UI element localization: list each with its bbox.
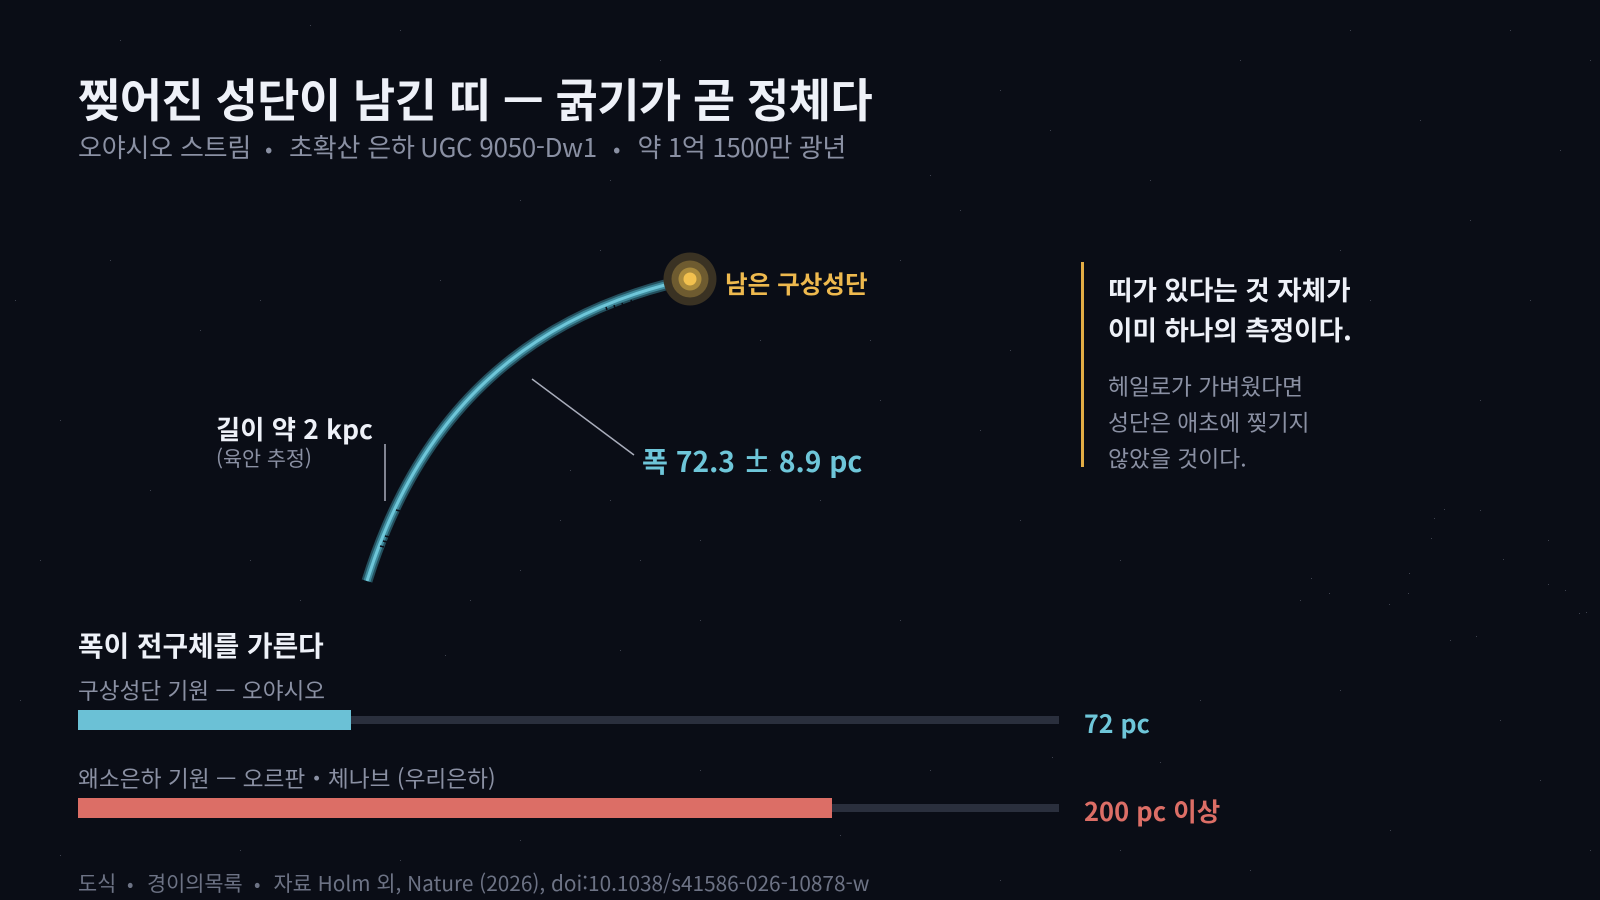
bar: dwarf galaxy origin: 왜소은하 기원 — 오르판・체나브 (우리은하) — [78, 761, 496, 794]
length label: 길이 약 2 kpc — [216, 408, 373, 447]
callout: measurement note — [1081, 262, 1352, 474]
bar: globular cluster origin — [78, 673, 1150, 741]
bar: globular cluster origin: 72 pc — [1084, 705, 1150, 741]
cluster label: 남은 구상성단 — [725, 265, 868, 301]
width label: 폭 72.3 ± 8.9 pc — [642, 440, 862, 481]
stellar stream arc — [367, 285, 665, 581]
subtitle: 약 1억 1500만 광년 — [638, 128, 846, 165]
subtitle: 오야시오 스트림 — [78, 128, 251, 165]
remaining globular cluster icon — [664, 252, 716, 306]
subtitle: 초확산 은하 — [289, 128, 422, 165]
footer source: 경이의목록 — [147, 867, 243, 897]
footer source: • — [254, 870, 260, 897]
subtitle: • — [265, 132, 272, 164]
footer source: • — [127, 870, 133, 897]
length leader line — [384, 444, 386, 501]
callout: measurement note: 성단은 애초에 찢기지 — [1108, 405, 1310, 438]
width leader line — [532, 379, 634, 455]
callout: measurement note: 헤일로가 가벼웠다면 — [1108, 369, 1303, 402]
section heading: 폭이 전구체를 가른다 — [78, 625, 324, 665]
title: 찢어진 성단이 남긴 띠 — 굵기가 곧 정체다 — [78, 65, 872, 131]
bar: globular cluster origin: 구상성단 기원 — 오야시오 — [78, 673, 325, 706]
bar: dwarf galaxy origin: 200 pc 이상 — [1084, 792, 1220, 829]
footer source: 자료 Holm 외, Nature (2026), doi:10.1038/s41586-026-10878-w — [274, 867, 870, 897]
callout: measurement note: 띠가 있다는 것 자체가 — [1108, 269, 1351, 308]
callout: measurement note: 이미 하나의 측정이다. — [1108, 309, 1352, 348]
bar: dwarf galaxy origin — [78, 761, 1220, 829]
footer source: 도식 — [78, 867, 116, 897]
callout: measurement note: 않았을 것이다. — [1108, 441, 1247, 474]
length label — [216, 408, 373, 472]
length label: (육안 추정) — [216, 442, 312, 472]
subtitle: UGC 9050-Dw1 — [420, 128, 597, 165]
subtitle: • — [613, 132, 620, 164]
